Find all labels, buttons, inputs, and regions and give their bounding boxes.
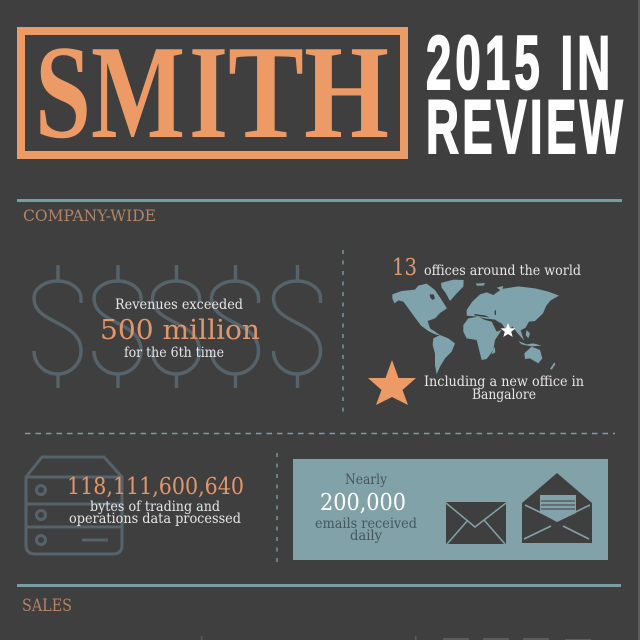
text: emails received (315, 472, 417, 544)
title: Smith logo: H (304, 18, 389, 166)
text: bytes processed: 118,111,600,640 (67, 474, 244, 500)
icon: open envelope (522, 473, 592, 543)
title: Smith logo (21, 18, 404, 166)
text: new office (424, 374, 584, 403)
title: Smith logo: S (35, 18, 91, 166)
text: offices count (392, 255, 581, 281)
title: Smith logo: I (189, 18, 228, 166)
icon: dollar signs (34, 265, 320, 388)
text: new office: Bangalore (472, 387, 536, 403)
text: emails received: Nearly (345, 472, 387, 488)
title: 2015 in review (426, 21, 623, 170)
text: emails received: emails received (315, 516, 417, 532)
text: emails received: 200,000 (320, 490, 406, 516)
section rule: company-wide (17, 199, 622, 202)
title: 2015 in review: 2015 IN (426, 21, 610, 106)
heading: company-wide: COMPANY-WIDE (23, 207, 156, 225)
title: Smith logo: T (228, 18, 304, 166)
text: bytes processed: bytes of trading and (90, 499, 220, 515)
text: new office: Including a new office in (424, 374, 584, 390)
world map (392, 280, 559, 374)
panel: emails (293, 459, 608, 560)
cut-off chart marks (201, 636, 591, 640)
text: revenues (100, 297, 260, 361)
title: Smith logo: M (91, 18, 185, 166)
icon: server (26, 457, 122, 554)
text: emails received: daily (350, 528, 382, 544)
section rule: sales (17, 584, 621, 587)
text: revenues: 500 million (100, 315, 260, 346)
text: revenues: for the 6th time (124, 345, 224, 361)
text: revenues: Revenues exceeded (115, 297, 243, 313)
text: offices count: 13 (392, 255, 417, 281)
text: offices count: offices around the world (424, 263, 581, 279)
icon: white star on Bangalore (500, 323, 516, 337)
title: 2015 in review: REVIEW (426, 85, 623, 170)
text: bytes processed (67, 474, 244, 527)
heading: sales: SALES (22, 596, 72, 616)
icon: orange star (368, 360, 416, 405)
text: bytes processed: operations data processed (69, 511, 241, 527)
icon: closed envelope (446, 502, 506, 544)
